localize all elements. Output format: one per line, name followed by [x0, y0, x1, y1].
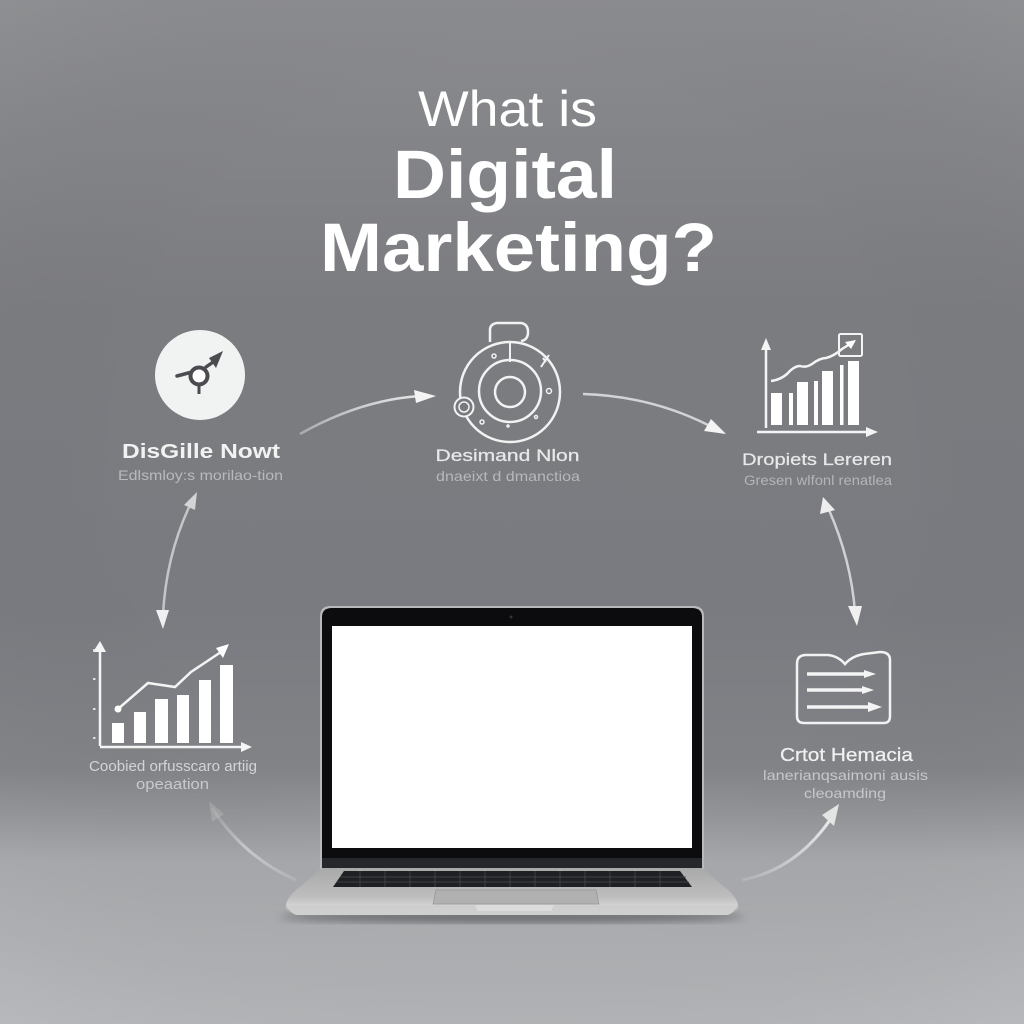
icon: white circle with arrow target	[155, 330, 245, 420]
step label: Coobied orfusscaro	[89, 759, 257, 793]
step label: Crtot Hemacia: Crtot Hemacia	[780, 745, 914, 765]
step label: DisGille Nowt: Edlsmloy:s morilao-tion	[118, 467, 283, 483]
arrow: double-headed right	[820, 497, 862, 626]
title: What is	[418, 81, 597, 137]
arrow: first to second step	[300, 390, 436, 434]
arrow: second to third step	[583, 394, 726, 434]
arrow: bottom left faded	[209, 801, 296, 880]
step label: Dropiets Lereren: Dropiets Lereren	[742, 450, 892, 469]
icon: circular dial	[454, 323, 560, 442]
step label: Desimand Nlon: Desimand Nlon	[436, 446, 580, 465]
arrow: bottom right	[742, 804, 839, 880]
step label: Dropiets Lereren	[742, 450, 893, 488]
step label: Dropiets Lereren: Gresen wlfonl renatlea	[744, 473, 893, 488]
laptop screen frame	[320, 606, 704, 869]
icon: rising bar chart	[93, 641, 252, 752]
title: Digital	[393, 136, 617, 213]
step label: Crtot Hemacia: cleoamding	[804, 785, 886, 801]
step label: Desimand Nlon: dnaeixt d dmanctioa	[436, 468, 580, 484]
step label: Crtot Hemacia: lanerianqsaimoni ausis	[763, 767, 928, 783]
step label: Desimand Nlon	[436, 446, 580, 484]
arrow: double-headed left	[156, 492, 197, 629]
laptop	[280, 606, 744, 923]
step label: DisGille Nowt	[118, 441, 283, 483]
title: Marketing?	[320, 209, 717, 286]
laptop base	[286, 868, 738, 915]
step label: Crtot Hemacia	[763, 745, 928, 801]
step label: DisGille Nowt: DisGille Nowt	[122, 441, 280, 463]
step label: Coobied orfusscaro: opeaation	[136, 777, 209, 793]
title	[320, 81, 717, 286]
step label: Coobied orfusscaro: Coobied orfusscaro artiig	[89, 759, 257, 775]
icon: open book with arrows	[797, 652, 890, 723]
laptop shadow	[280, 911, 744, 923]
icon: bar chart with arrow box	[757, 334, 878, 437]
